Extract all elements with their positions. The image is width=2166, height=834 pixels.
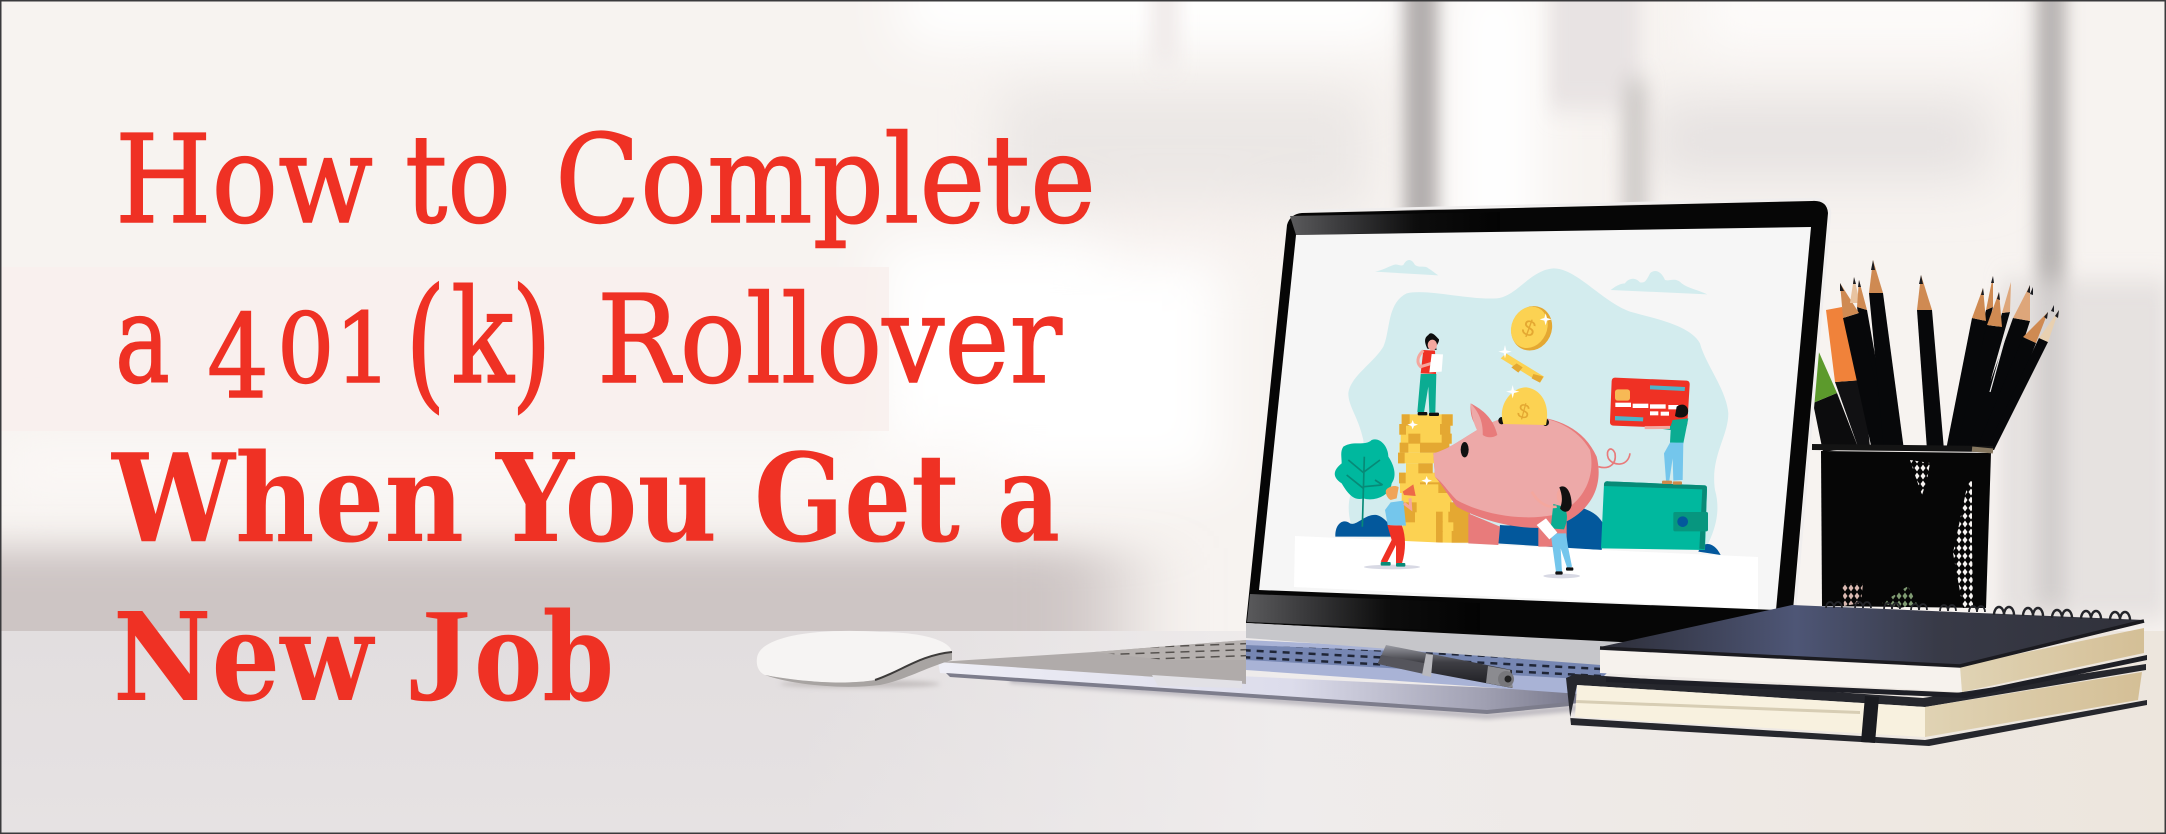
green and orange highlighters: [1813, 307, 1870, 452]
spiral binding: [1826, 602, 2130, 620]
title line 3: Get: [754, 426, 960, 570]
title line 1: How: [115, 109, 373, 251]
ground: [1294, 536, 1758, 609]
title line 3: When: [110, 426, 464, 570]
title line 2: ): [511, 258, 552, 427]
title line 2: k: [451, 261, 515, 413]
pen holder with pencils: [1812, 260, 2059, 608]
pale band behind second title line: [0, 267, 889, 431]
hills: [1335, 508, 1721, 555]
laptop screen: [1259, 227, 1811, 610]
man with megaphone: [1364, 484, 1420, 569]
hinge: [1246, 623, 1700, 668]
red credit card: [1610, 378, 1690, 428]
piggy ear: [1471, 403, 1497, 437]
title line 2: a: [115, 269, 170, 411]
upper notebook: [1600, 605, 2147, 698]
tree: [1335, 439, 1395, 527]
title: [110, 109, 1096, 729]
sparkles: [1407, 313, 1552, 485]
title line 2: (: [405, 258, 446, 427]
lower notebook: [1566, 664, 2147, 746]
screen illustration: piggy bank: [1294, 260, 1758, 609]
tabletop: [2, 631, 1132, 832]
notebooks: [1566, 602, 2147, 746]
clouds: [1375, 260, 1707, 294]
title line 3: [110, 426, 1060, 570]
mesh cup: [1812, 447, 1993, 608]
piggy body: [1433, 416, 1599, 528]
pen: [1378, 645, 1514, 688]
title line 3: a: [997, 426, 1060, 570]
piggy eye and slot: [1461, 442, 1469, 457]
title line 1: to: [405, 109, 511, 251]
falling gold coin: $: [1519, 314, 1540, 342]
title line 2: 4: [207, 291, 269, 425]
title line 4: [113, 581, 614, 729]
bezel bottom gloss: [1247, 594, 1480, 632]
pencils: [1840, 260, 2059, 450]
piggy tail: [1598, 449, 1630, 468]
title line 2: 01: [277, 293, 392, 405]
title line 3: You: [494, 426, 717, 570]
laptop: [938, 199, 1830, 716]
title line 1: [115, 109, 1096, 251]
title line 1: Complete: [555, 109, 1096, 251]
gold coin entering slot: [1502, 387, 1547, 425]
silver rim: [1289, 199, 1830, 610]
falling gold coin: [1504, 299, 1559, 357]
laptop screen bezel: [1246, 201, 1828, 644]
stack of gold coins: [1398, 414, 1470, 543]
title line 4: New: [113, 585, 376, 729]
coin in flight on edge: [1501, 353, 1544, 383]
title line 2: [115, 258, 1063, 427]
gold coin entering slot: $: [1515, 399, 1533, 424]
bezel top gloss: [1290, 212, 1500, 235]
piggy legs: [1468, 513, 1567, 547]
mouse: [757, 631, 952, 688]
title line 4: J: [405, 581, 471, 729]
woman on coins: [1417, 333, 1443, 416]
man holding card: [1645, 405, 1688, 485]
background blob: [1348, 268, 1728, 547]
laptop base and keyboard: [938, 640, 1620, 714]
title line 4: ob: [474, 585, 614, 729]
title line 2: Rollover: [597, 269, 1063, 411]
green wallet: [1601, 481, 1708, 550]
laptop base shadow: [1010, 680, 1600, 716]
woman with paper: [1532, 486, 1580, 578]
